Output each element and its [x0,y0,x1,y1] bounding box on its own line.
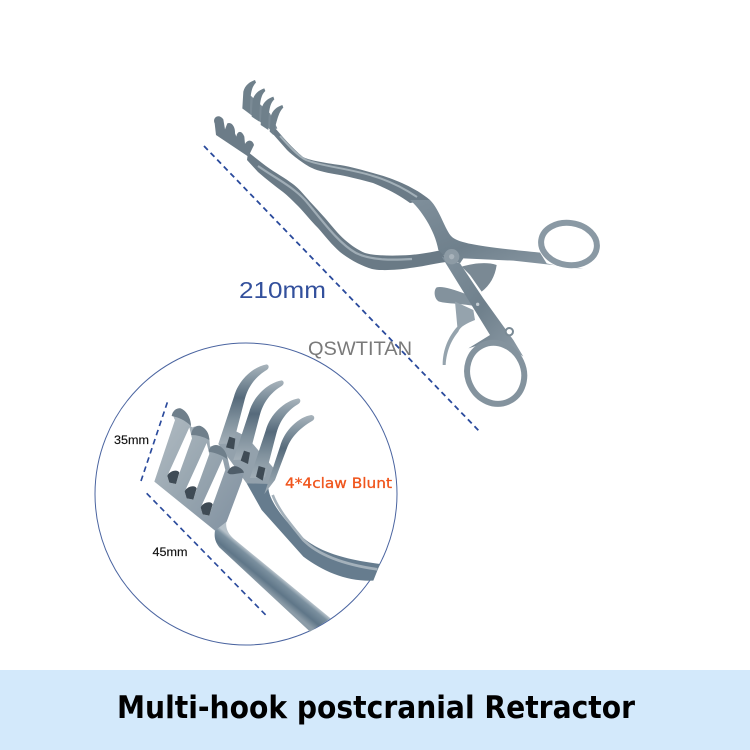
banner title: Multi-hook postcranial Retractor [117,690,636,726]
back claw arm [247,475,380,581]
banner [0,670,750,750]
claw detail drawing [140,364,380,632]
label: 4*4claw Blunt: 4*4claw Blunt [285,476,392,492]
dimension line: 210mm [204,146,481,433]
front claw arm [215,520,331,632]
back claw palm [218,428,277,484]
label: 35mm: 35mm [114,435,149,447]
ratchet bar upper [462,263,497,292]
ratchet bar lower [435,287,477,307]
panel: detail circle [95,343,397,645]
handles, ratchet and rings [410,200,600,413]
lower ring [457,333,534,413]
lower arm [247,152,446,270]
upper arm [272,128,430,203]
back claw [218,364,380,581]
upper jaw with four claws [242,80,283,135]
upper ring [538,219,600,269]
hook tops [172,408,191,426]
lower handle [442,257,523,357]
side clip [506,328,513,335]
slots [167,427,192,484]
upper handle [410,200,583,268]
front claw silhouette [154,408,244,531]
label: 45mm: 45mm [152,547,188,559]
watermark: QSWTITAN: QSWTITAN [308,339,412,360]
instrument: full retractor [214,80,600,413]
lower jaw with four claws [214,116,254,157]
dimension line: 45mm [147,493,268,618]
front claw [154,408,331,632]
label: 210mm: 210mm [239,277,326,303]
spring [443,302,475,365]
dimension line: 35mm [140,402,167,484]
pivot screw [444,249,459,264]
